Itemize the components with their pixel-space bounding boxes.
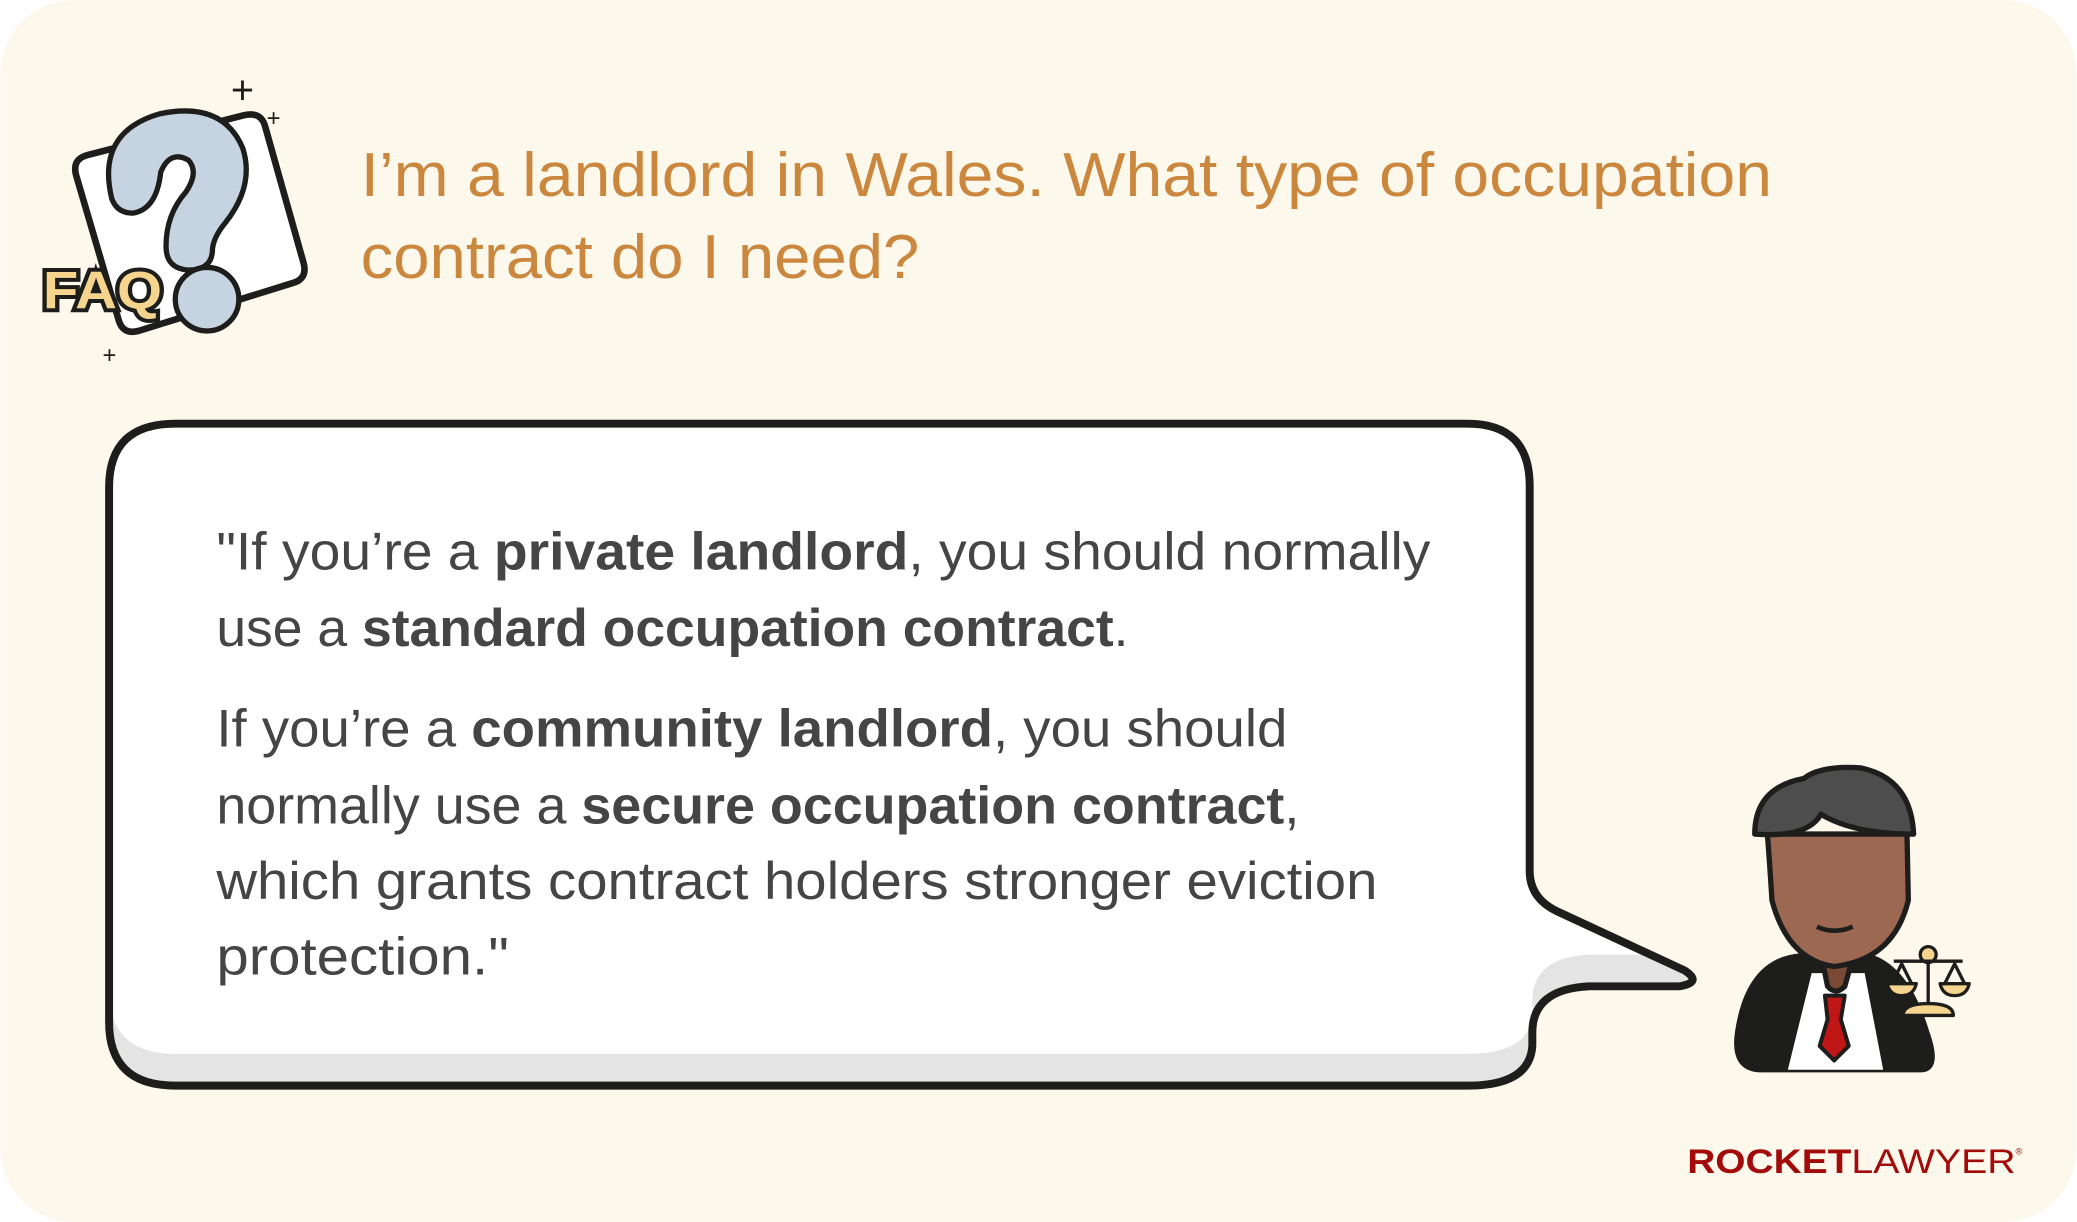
icon: FAQ question: +: [231, 68, 254, 112]
icon: FAQ question: +: [102, 342, 116, 369]
icon: FAQ question: +: [267, 105, 281, 132]
logo: Rocket Lawyer: [1687, 1143, 2023, 1181]
quote text: If you’re a community landlord , you should: [216, 700, 1287, 759]
title: contract do I need?: [361, 223, 919, 292]
logo: Rocket Lawyer: LAWYER: [1851, 1143, 2016, 1181]
title: [361, 141, 1772, 292]
quote text: which grants contract holders stronger eviction: [215, 852, 1377, 911]
quote text: use a standard occupation contract.: [216, 599, 1129, 658]
icon: lawyer: [1737, 767, 1969, 1070]
icon: FAQ question: [43, 68, 305, 369]
logo: Rocket Lawyer: ®: [2016, 1146, 2023, 1156]
icon: FAQ question: FAQ: [43, 261, 162, 320]
quote text: protection.": [216, 927, 509, 986]
quote text: [215, 522, 1431, 986]
quote text: "If you’re a private landlord , you should normally: [216, 522, 1431, 581]
quote text: normally use a secure occupation contract ,: [216, 776, 1299, 835]
title: I’m a landlord in Wales. What type of occupation: [361, 141, 1772, 210]
speech bubble: [109, 392, 1693, 1086]
logo: Rocket Lawyer: ROCKET: [1687, 1143, 1851, 1181]
